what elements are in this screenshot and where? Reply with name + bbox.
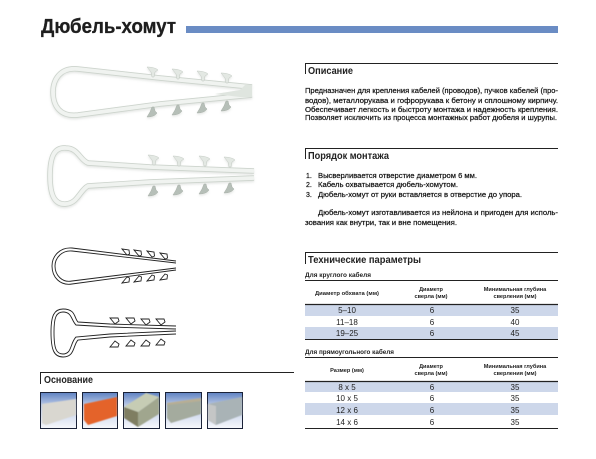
table: rectangular cable: 35 [511, 394, 520, 403]
section: base materials [40, 372, 294, 386]
table: round cable: Минимальная глубина [484, 286, 547, 293]
mounting steps: 3. [306, 192, 312, 199]
table caption: round cable: Для круглого кабеля [305, 272, 372, 279]
table: round cable: 35 [511, 306, 520, 315]
table: round cable: 19–25 [336, 329, 359, 338]
table: rectangular cable: 8 x 5 [338, 383, 356, 392]
mounting steps: 2. [306, 182, 312, 189]
table: rectangular cable: 6 [430, 394, 435, 403]
table: rectangular cable: 14 x 6 [336, 418, 358, 427]
mounting steps: 1. [306, 173, 312, 180]
table: round cable: 5–10 [338, 306, 356, 315]
description text: Позволяет исключить из процесса монтажных работ дюбеля и шурупы. [305, 114, 557, 122]
table: rectangular cable: 35 [511, 406, 520, 415]
swatch: aerated concrete block [124, 392, 160, 428]
panel: description [306, 64, 558, 77]
table: rectangular cable: 6 [430, 406, 435, 415]
swatch: concrete block [166, 392, 202, 428]
panel: technical parameters [306, 252, 558, 266]
heading: description: Описание [308, 66, 353, 77]
mounting steps: Высверливается отверстие диаметром 6 мм. [318, 173, 477, 180]
table caption: rectangular cable: Для прямоугольного кабеля [305, 349, 395, 356]
table: rectangular cable: 12 x 6 [336, 406, 358, 415]
table: round cable: 11–18 [336, 318, 358, 327]
line drawing: round-eye clamp [51, 309, 176, 357]
table: rectangular cable: сверла (мм) [414, 371, 448, 377]
material note: зования как внутри, так и вне помещения. [305, 220, 457, 227]
table: rectangular cable: Диаметр [419, 364, 444, 370]
title: Дюбель-хомут [41, 16, 176, 38]
description text [305, 87, 559, 122]
table: round cable: 6 [430, 318, 435, 327]
mounting steps [306, 173, 522, 199]
table: round cable: 45 [511, 329, 520, 338]
description text: водов), металлорукава и гофрорукава к бетону и сплошному кирпичу. [305, 97, 558, 105]
heading: technical parameters: Технические параметры [308, 255, 421, 266]
table: rectangular cable: 6 [430, 383, 435, 392]
table: round cable: сверла (мм) [414, 294, 448, 300]
table: rectangular cable: Размер (мм) [330, 368, 364, 374]
table: rectangular cable: сверления (мм) [493, 371, 537, 377]
swatch: white block [40, 392, 76, 428]
table: rectangular cable: 10 x 5 [336, 394, 358, 403]
table: round cable: 40 [511, 318, 520, 327]
title accent bar [186, 26, 558, 33]
table: rectangular cable: 6 [430, 418, 435, 427]
table: rectangular cable: 35 [511, 418, 520, 427]
swatch: orange brick [82, 392, 118, 428]
heading: base materials: Основание [44, 375, 93, 386]
description text: Предназначен для крепления кабелей (проводов), пучков кабелей (про- [305, 87, 559, 95]
mounting steps: Дюбель-хомут от руки вставляется в отверстие до упора. [318, 191, 522, 199]
table: round cable: сверления (мм) [493, 294, 537, 300]
description text: Обеспечивает легкость и быстроту монтажа и надежность крепления. [305, 106, 558, 114]
table: round cable: Диаметр обхвата (мм) [315, 290, 379, 297]
panel: mounting procedure [306, 148, 558, 162]
heading: mounting procedure: Порядок монтажа [308, 151, 389, 162]
table: round cable: 6 [430, 329, 435, 338]
material note [305, 209, 559, 227]
table: round cable: 6 [430, 306, 435, 315]
line drawing: U-shaped clamp [52, 248, 176, 284]
table: round cable [305, 280, 558, 340]
material note: Дюбель-хомут изготавливается из нейлона и пригоден для исполь- [318, 209, 559, 217]
table: round cable: Диаметр [419, 287, 444, 293]
table: rectangular cable: Минимальная глубина [484, 363, 547, 370]
swatch: grey stone block [208, 392, 242, 428]
table: rectangular cable [305, 358, 558, 428]
photo: loop clamp with U-shaped head [53, 67, 252, 117]
table: rectangular cable: 35 [511, 383, 520, 392]
photo: clamp with round eye head [50, 148, 254, 204]
mounting steps: Кабель охватывается дюбель-хомутом. [318, 181, 458, 189]
